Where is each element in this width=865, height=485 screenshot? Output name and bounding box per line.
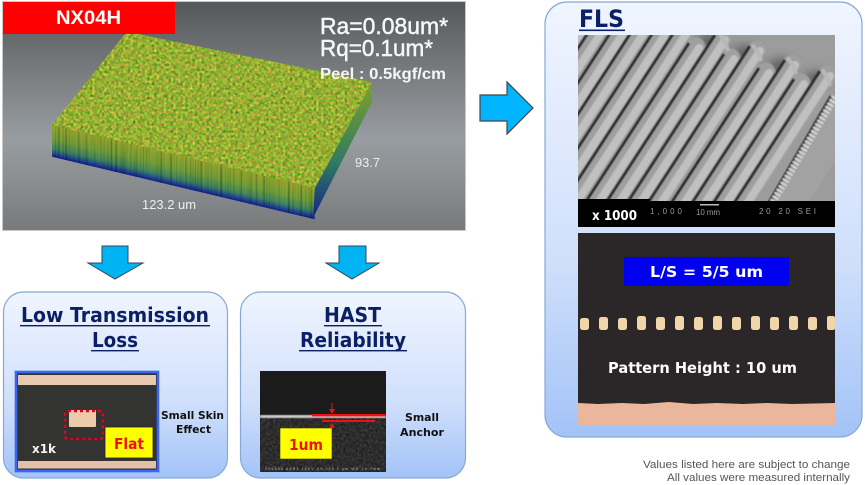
dimension label: depth: 93.7 [355,155,380,170]
SEM scale info: 20 20 SEI [759,207,816,216]
cross-section photo: pattern [578,233,835,425]
magnification label [578,199,650,224]
panel: HAST reliability [240,292,466,478]
footer note: Values listed here are subject to change [643,459,850,471]
heading: FLS: FLS [579,5,624,33]
note: small skin effect: Small Skin [161,409,224,422]
heading: HAST reliability: Reliability [300,328,406,352]
red label: NX04H: NX04H [56,8,121,29]
note: small skin effect [161,409,224,436]
red dotted outline [65,411,103,439]
heading: low transmission loss [20,303,210,352]
panel: low transmission loss [4,292,228,478]
footer note [643,459,851,484]
conductor pads [580,316,835,330]
roughness values [320,13,448,83]
red label: NX04H [3,2,175,34]
scale bar strip [578,201,835,227]
note: small skin effect: Effect [176,423,211,436]
L/S label: L/S = 5/5 um [650,263,763,281]
roughness values: Peel : 0.5kgf/cm [320,66,446,83]
note: small anchor: Anchor [400,426,445,439]
3D roughness surface [50,30,375,219]
SEM info strip: S05858 AAR1 15KV X5,000 1 μm WD 14.7mm [265,467,380,471]
roughness values: Ra=0.08um* [320,13,448,39]
magnification label: x 1000 [592,208,637,224]
SEM scale info: 1,000 [650,207,683,216]
L/S label [624,257,789,286]
panel: NX04H surface photo [2,2,466,230]
roughness values: Rq=0.1um* [320,35,433,61]
callout: 1um: 1um [289,436,323,454]
panel: FLS [544,1,863,438]
heading: low transmission loss: Loss [92,328,138,352]
red thickness marks [312,403,386,428]
callout: Flat: Flat [114,435,144,453]
magnification label: x1k [32,442,57,456]
arrow: right to FLS [480,82,533,134]
heading: HAST reliability: HAST [324,303,381,327]
arrow: down to transmission loss [88,246,143,279]
copper base [578,402,835,425]
note: small anchor [400,411,445,439]
cross-section photo: flat conductor [16,372,158,471]
callout: Flat [105,427,153,458]
heading: low transmission loss: Low Transmission [21,303,209,327]
dimension label: width: 123.2 um [142,197,196,212]
arrow: down to HAST reliability [326,246,379,279]
pattern height label: Pattern Height : 10 um [608,359,797,377]
footer note: All values were measured internally [667,472,851,484]
heading: HAST reliability [299,303,407,352]
SEM scale info: 10 mm [696,208,720,217]
SEM photo: small anchor [260,371,386,472]
SEM photo: fine lines [578,35,835,227]
SEM scale info [650,204,816,217]
note: small anchor: Small [405,411,439,424]
